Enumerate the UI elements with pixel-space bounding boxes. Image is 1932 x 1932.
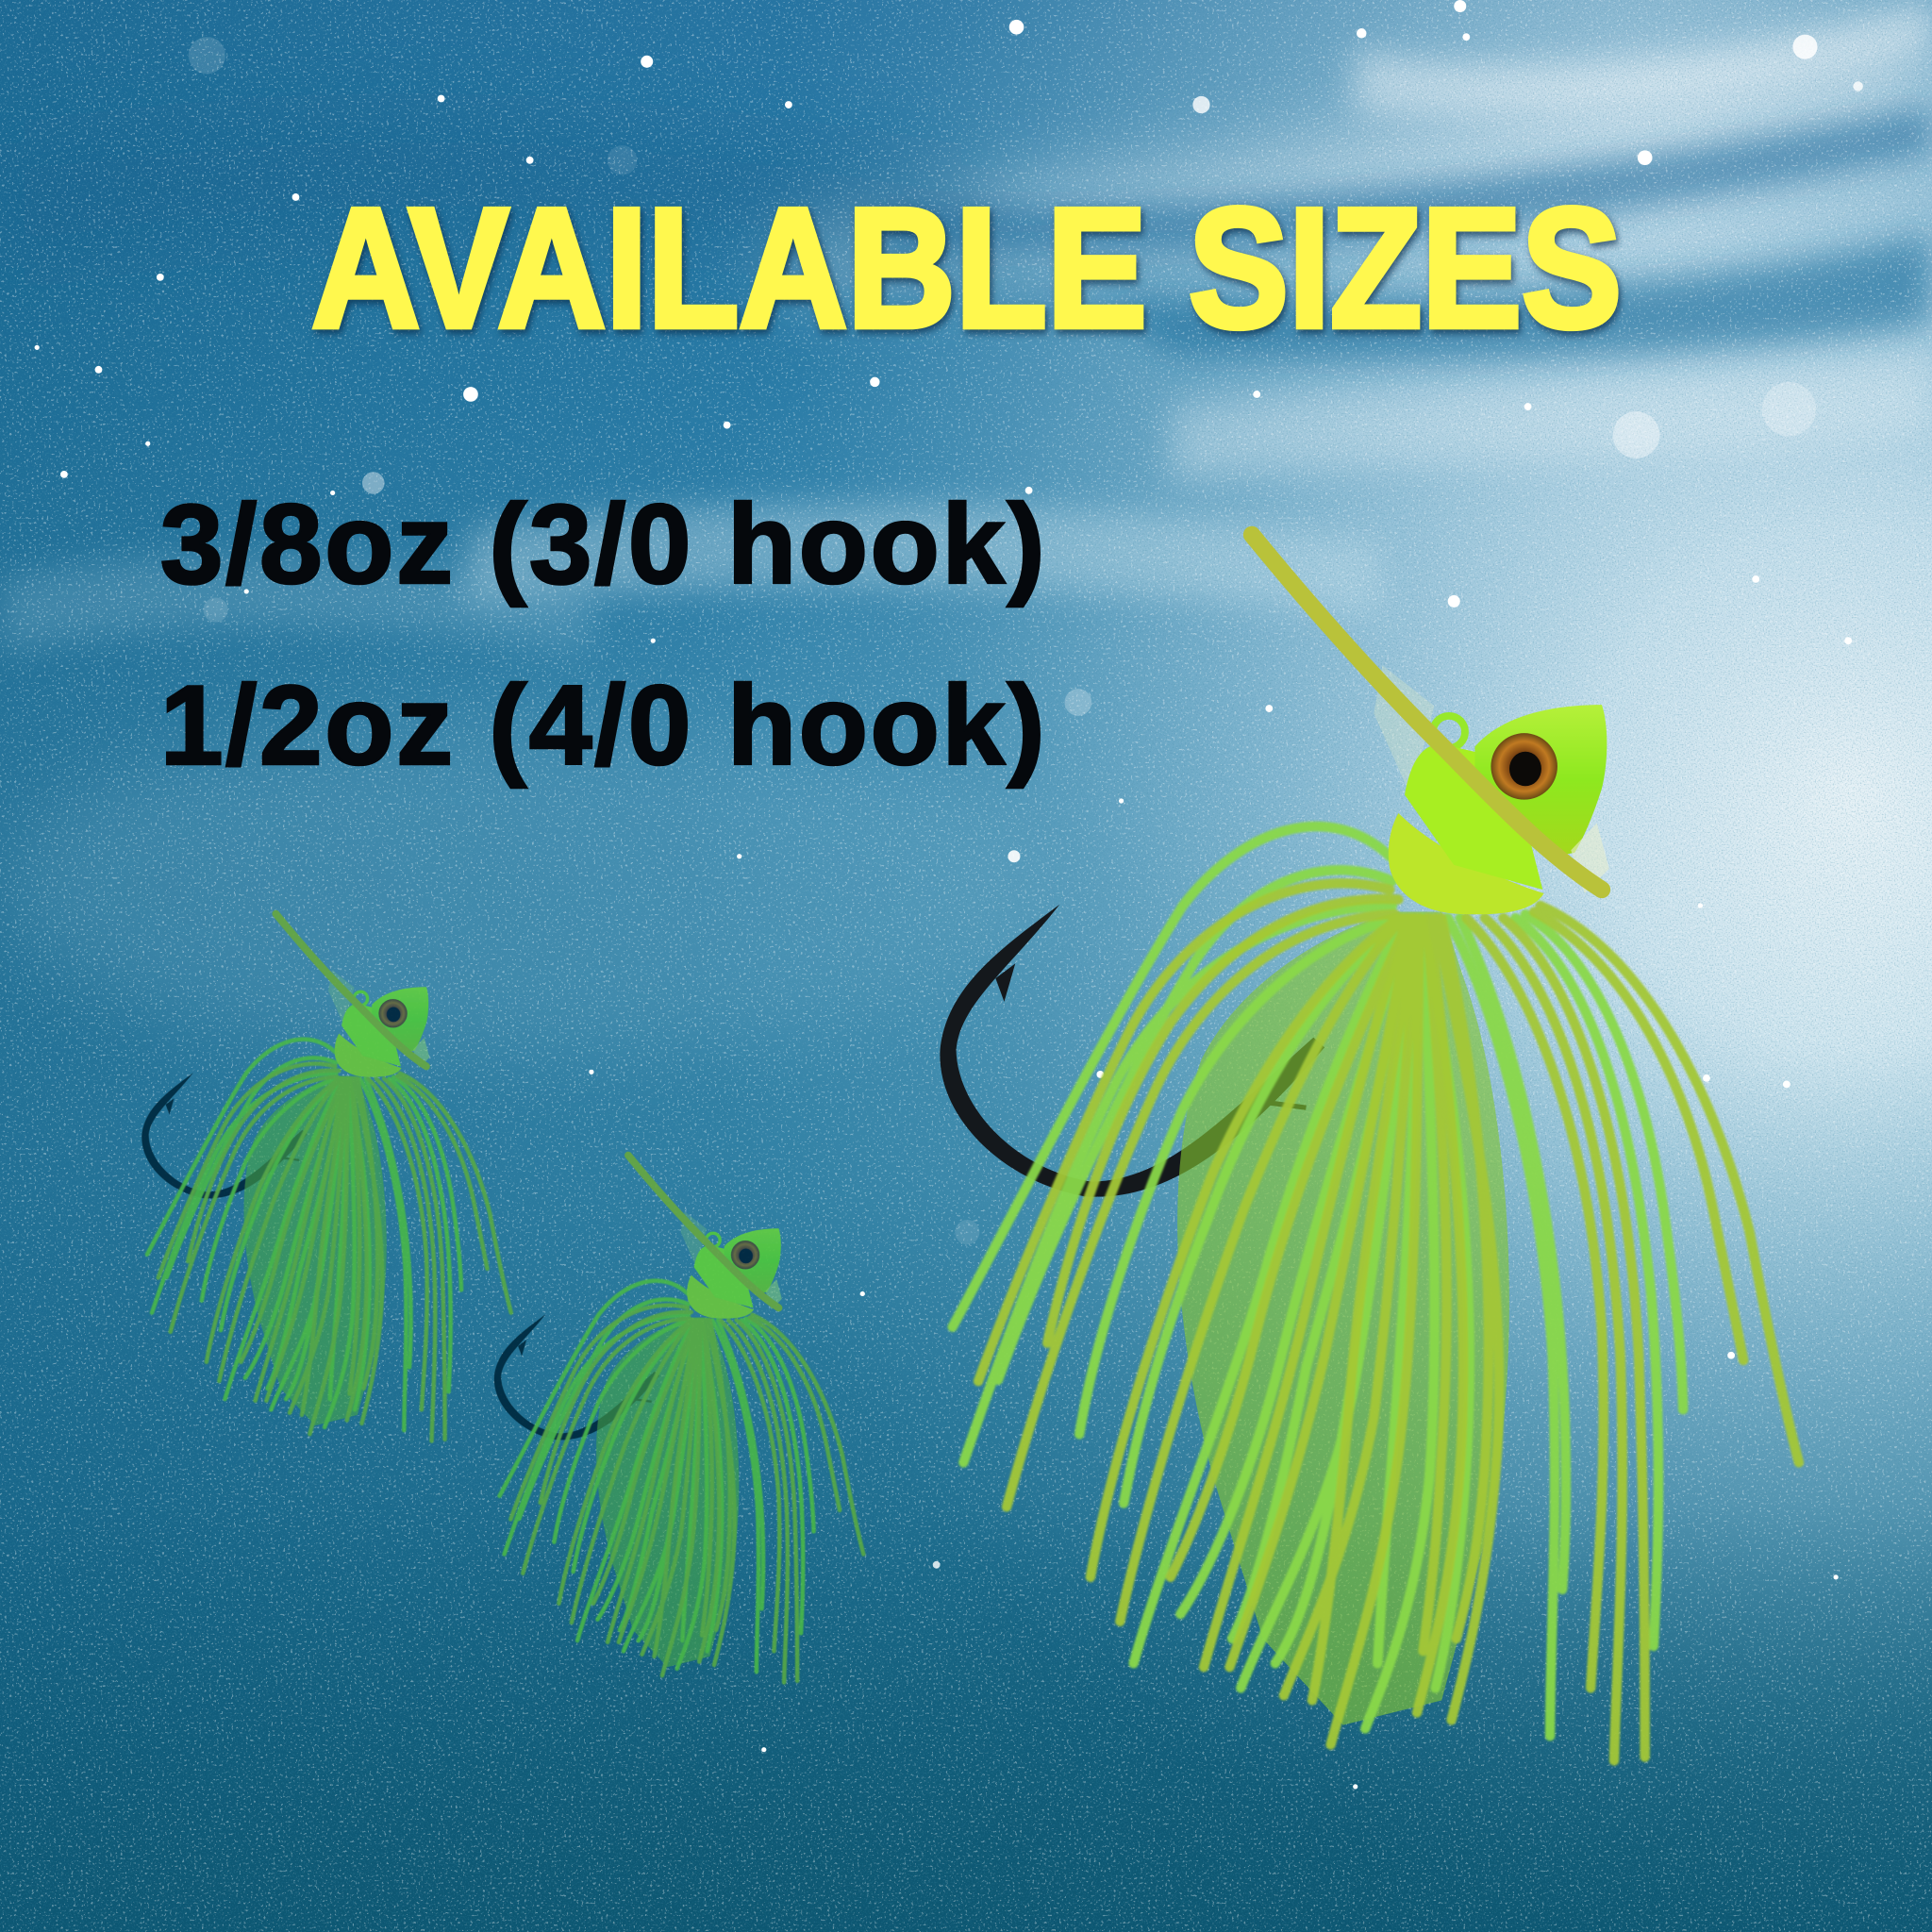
weed guard <box>1252 535 1602 890</box>
line tie <box>1433 716 1465 748</box>
size option: 3/8oz: 3/8oz (3/0 hook) <box>160 481 1045 608</box>
small lure: 3/8oz jig, centre <box>494 1156 863 1682</box>
small lure: 3/8oz jig, left <box>142 914 511 1441</box>
clear weed guard base <box>1374 665 1434 796</box>
eye <box>1491 733 1557 800</box>
collar <box>1389 813 1544 914</box>
jig body <box>1405 744 1542 890</box>
hook <box>940 905 1324 1197</box>
skirt strands <box>953 826 1799 1760</box>
large lure: 1/2oz jig <box>940 535 1799 1760</box>
clear chin plate <box>1571 823 1609 893</box>
size option: 1/2oz: 1/2oz (4/0 hook) <box>160 662 1045 789</box>
title: AVAILABLE SIZES <box>311 173 1622 362</box>
jig head <box>1474 705 1607 855</box>
skirt body mass <box>1177 912 1509 1725</box>
